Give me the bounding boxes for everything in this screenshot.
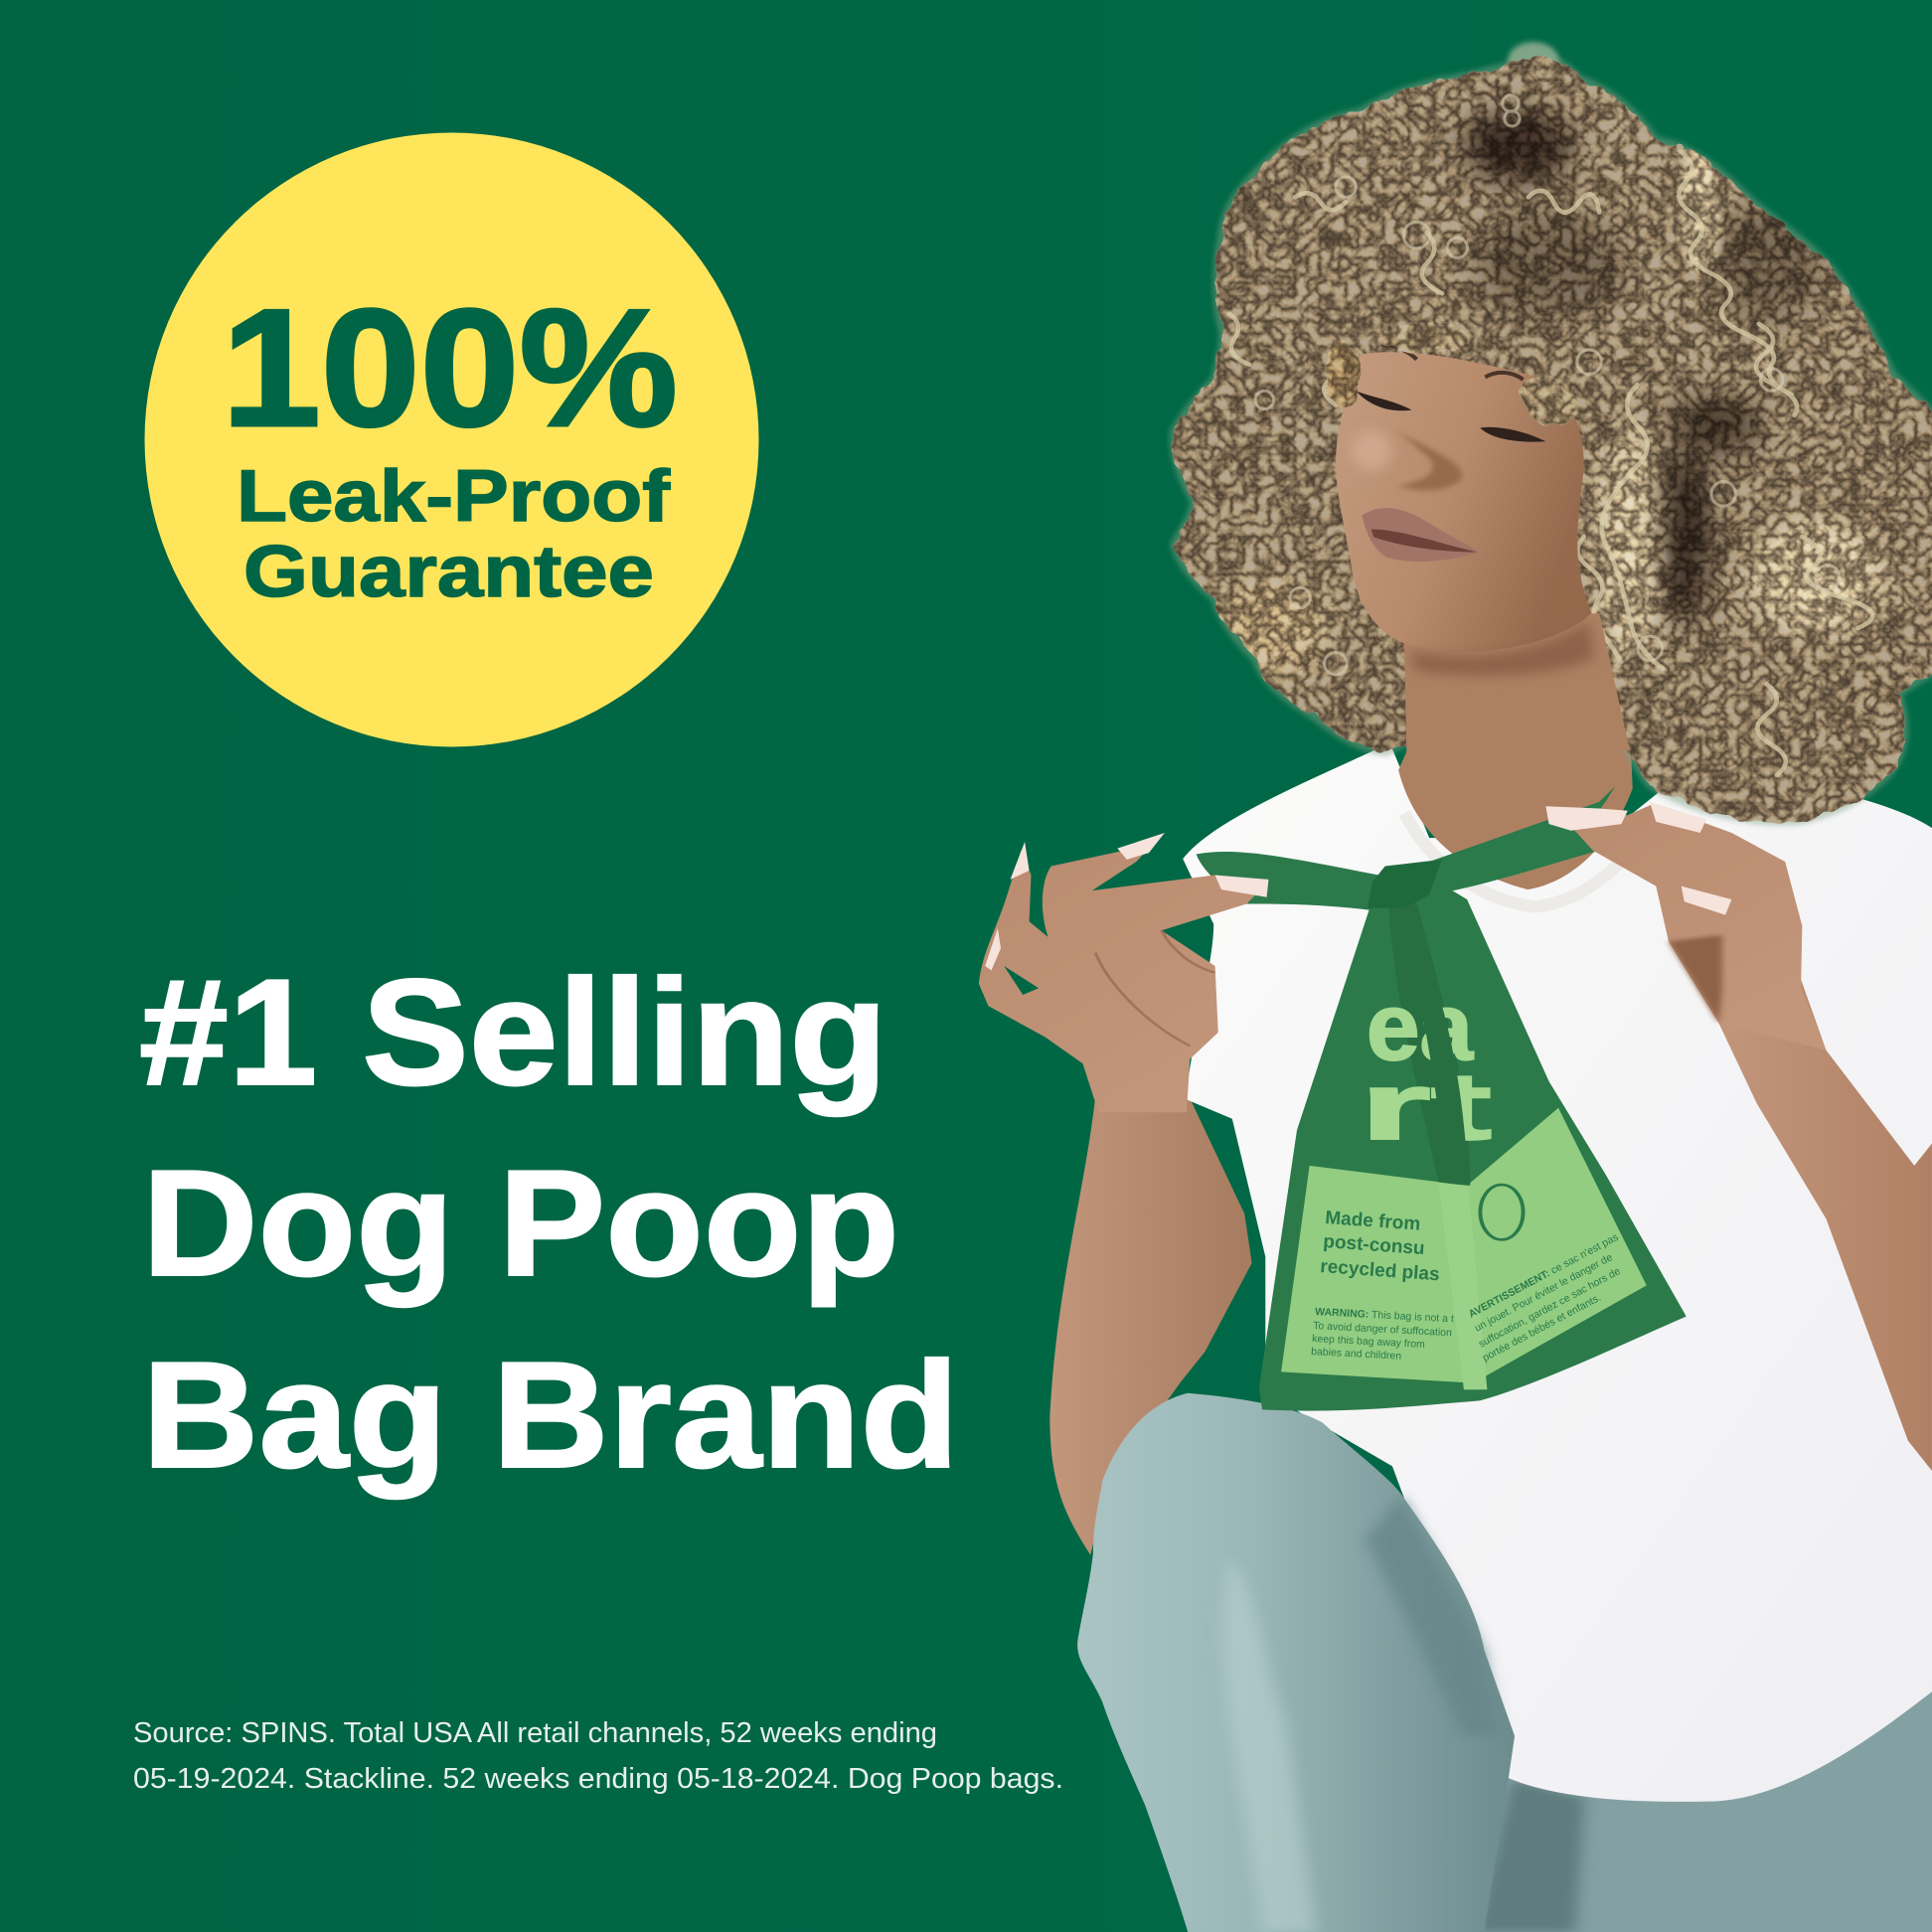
bag warning text: babies and children	[1311, 1346, 1402, 1363]
chin shadow	[1411, 620, 1594, 676]
light label panel	[1281, 1108, 1647, 1383]
bag claim text: Made from	[1325, 1208, 1421, 1235]
bag warning text: keep this bag away from	[1312, 1333, 1425, 1351]
soft pale hair halo	[1173, 56, 1932, 822]
t-shirt	[1183, 743, 1932, 1802]
source note: Source: SPINS. Total USA All retail channels, 52 weeks ending	[133, 1717, 937, 1749]
bag logo: rt	[1360, 1053, 1492, 1160]
bag seal	[1480, 1185, 1524, 1239]
curl ringlets	[1255, 95, 1840, 675]
badge figure: 100%	[222, 274, 678, 461]
stray hair wisp	[1508, 42, 1558, 79]
bag logo	[1360, 974, 1492, 1160]
badge line two: Guarantee	[243, 532, 654, 612]
bag warning text: To avoid danger of suffocation	[1313, 1320, 1452, 1339]
badge line one: Leak-Proof	[237, 456, 671, 537]
headline: Bag Brand	[142, 1331, 959, 1500]
near leg highlight	[1223, 1557, 1316, 1932]
left arm	[1049, 1096, 1252, 1555]
headline: Dog Poop	[142, 1139, 899, 1308]
right eye	[1480, 427, 1546, 442]
face skin	[1336, 352, 1592, 652]
bag warning text: un jouet. Pour éviter le danger de	[1473, 1251, 1615, 1335]
far leg of sweatpants	[1475, 1668, 1932, 1932]
bag body	[1259, 873, 1687, 1411]
right handle	[1429, 786, 1615, 895]
bag knot	[1368, 860, 1442, 908]
textured hair mass	[1173, 56, 1932, 822]
bag warning text	[1311, 1231, 1623, 1365]
source note	[133, 1717, 1063, 1795]
neck patch	[1404, 613, 1630, 752]
left brow	[1381, 344, 1417, 360]
hair tone patches	[1213, 111, 1883, 674]
neck and collar	[1398, 641, 1633, 906]
bag warning text: suffocation, gardez ce sac hors de	[1477, 1265, 1623, 1351]
right brow	[1485, 373, 1524, 380]
badge circle	[145, 133, 759, 747]
source note: 05-19-2024. Stackline. 52 weeks ending 05-18-2024. Dog Poop bags.	[133, 1763, 1063, 1795]
face	[1326, 326, 1630, 752]
right palm shadow	[1669, 935, 1722, 1024]
left handle	[1197, 852, 1378, 910]
bag shape	[1197, 786, 1687, 1411]
yellow guarantee badge	[145, 133, 759, 747]
far leg crease	[1475, 1779, 1585, 1932]
cheek highlight	[1351, 430, 1391, 471]
bag warning text: portée des bébés et enfants.	[1481, 1292, 1603, 1365]
bag centre fold	[1368, 860, 1487, 1389]
logo fold overlay	[1415, 979, 1468, 1186]
right hand	[1545, 802, 1826, 1050]
bag warning text: WARNING: This bag is not a t	[1315, 1306, 1454, 1325]
right arm	[1719, 979, 1932, 1471]
left hand nails	[985, 833, 1268, 970]
curl strands	[1229, 151, 1872, 775]
bag claim text: post-consu	[1323, 1231, 1425, 1259]
woman holding bag	[979, 42, 1932, 1932]
left palm crease	[1095, 930, 1215, 1046]
bag claim text: recycled plas	[1320, 1256, 1440, 1285]
front curls	[1326, 326, 1586, 435]
near leg shadow	[1365, 1495, 1500, 1736]
left hand	[979, 833, 1268, 1112]
headline	[139, 948, 959, 1500]
near leg of sweatpants	[1077, 1393, 1515, 1932]
nose shadow	[1396, 430, 1462, 490]
bag warning text: AVERTISSEMENT: ce sac n'est pas	[1467, 1231, 1620, 1321]
left eye	[1356, 391, 1411, 410]
bag logo: ea	[1367, 974, 1474, 1080]
dog poop bag	[1197, 786, 1687, 1411]
curly hair	[1173, 42, 1932, 822]
lips	[1362, 508, 1479, 562]
right hand nails	[1545, 802, 1731, 915]
bag claim text	[1320, 1208, 1440, 1285]
headline: #1 Selling	[139, 948, 887, 1117]
